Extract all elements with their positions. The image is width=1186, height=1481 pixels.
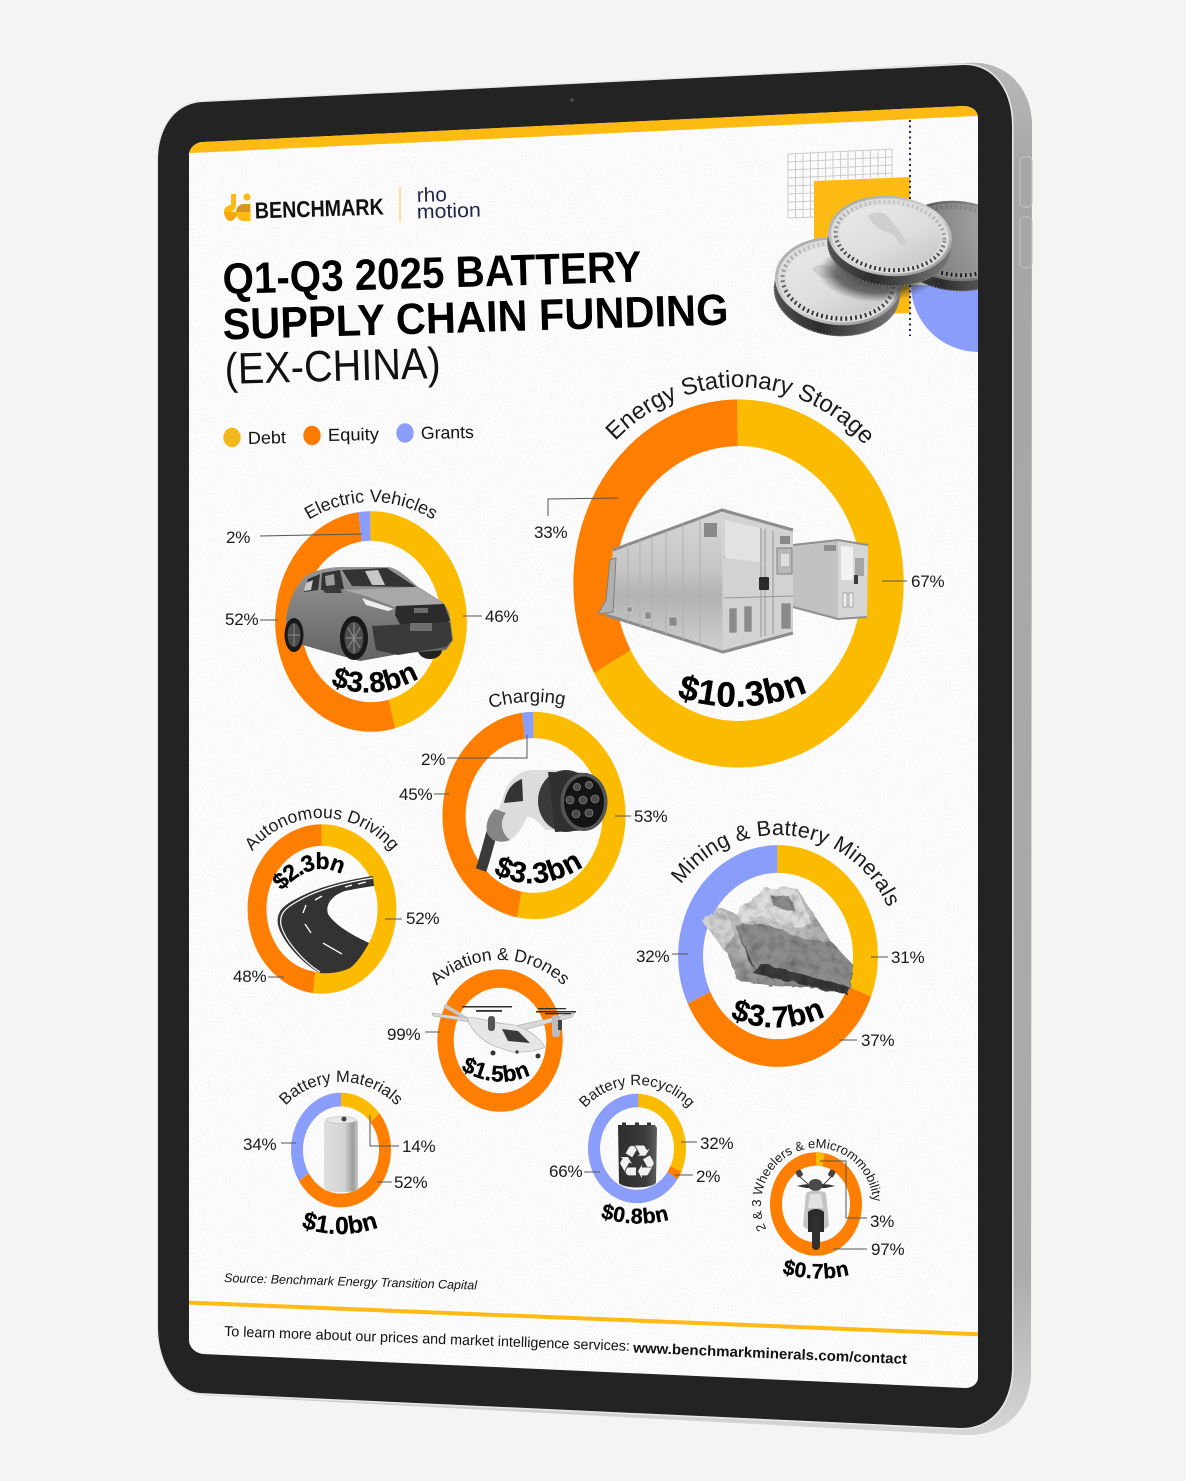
value: $3.7bn — [732, 999, 824, 1028]
pct 37: 37% — [861, 1031, 895, 1050]
panel: Charging — [399, 688, 667, 920]
donut chart — [594, 1100, 680, 1196]
panel: Battery Recycling — [550, 1074, 733, 1224]
logo: Benchmark — [224, 187, 400, 223]
pct 14: 14% — [402, 1137, 436, 1156]
icon: recycling battery: ♻ — [616, 1135, 658, 1189]
pct 99: 99% — [387, 1025, 421, 1044]
leader lines — [672, 954, 888, 1040]
label: Charging — [489, 688, 565, 708]
legend — [223, 422, 474, 448]
source note: Source: Benchmark Energy Transition Capital — [224, 1271, 478, 1293]
pct 45: 45% — [399, 785, 433, 804]
label: Energy Stationary Storage — [605, 370, 872, 443]
leader lines — [584, 1142, 697, 1175]
icon: scooter — [795, 1169, 836, 1250]
label: Aviation & Drones — [432, 948, 568, 986]
donut chart — [594, 423, 883, 744]
pct 32: 32% — [636, 947, 670, 966]
value: $3.8bn — [332, 666, 418, 693]
pct 33: 33% — [534, 523, 568, 542]
pct 34: 34% — [243, 1135, 277, 1154]
panel: Electric Vehicles — [226, 490, 518, 732]
pct 52: 52% — [225, 610, 259, 629]
logo wordmark: BENCHMARK — [254, 193, 384, 223]
footer call to action — [224, 1324, 907, 1368]
leader lines — [281, 1115, 399, 1182]
legend: equity: Equity — [328, 424, 379, 445]
legend: equity — [303, 424, 379, 445]
panel: Mining & Battery Minerals — [636, 820, 924, 1067]
screen — [189, 106, 978, 1388]
value: $0.7bn — [783, 1259, 848, 1279]
pct 53: 53% — [634, 807, 668, 826]
legend: grants — [396, 422, 474, 443]
front container — [598, 510, 793, 652]
label: Battery Recycling — [578, 1074, 694, 1108]
legend: grants: Grants — [421, 422, 474, 443]
title: Q1-Q3 2025 BATTERY — [222, 243, 642, 304]
decoration: dotted line — [909, 120, 911, 336]
pct 32: 32% — [700, 1134, 734, 1153]
logo: rho motion: motion — [416, 199, 481, 223]
title: (EX-CHINA) — [224, 339, 441, 394]
pct 3: 3% — [870, 1212, 894, 1231]
icon: EV charger — [481, 770, 608, 870]
icon: road — [278, 876, 374, 973]
logo: rho motion: rho — [416, 184, 447, 207]
legend: debt: Debt — [248, 427, 286, 448]
pct 66: 66% — [549, 1162, 583, 1181]
panel: Autonomous Driving — [233, 808, 439, 994]
legend: debt — [223, 427, 286, 448]
tablet silver frame — [158, 63, 1032, 1435]
leader lines — [820, 1161, 867, 1249]
label: 2 & 3 Wheelers & eMicrommobility — [752, 1138, 880, 1232]
value: $1.5bn — [462, 1057, 530, 1082]
pct 2: 2% — [421, 750, 445, 769]
footer call to action: www.benchmarkminerals.com/contact — [632, 1340, 907, 1368]
value: $2.3bn — [273, 852, 344, 889]
leader lines — [548, 498, 907, 581]
leader line — [425, 1031, 440, 1033]
tablet camera — [570, 98, 574, 102]
pct 46: 46% — [485, 607, 519, 626]
donut chart — [288, 526, 454, 717]
panel: Aviation & Drones — [388, 948, 576, 1112]
donut chart — [297, 1100, 385, 1200]
label: Autonomous Driving — [246, 808, 398, 852]
tablet device — [158, 63, 1032, 1435]
icon: battery cell — [324, 1116, 358, 1192]
donut chart — [454, 725, 614, 906]
donut chart — [446, 978, 554, 1102]
leader lines — [260, 534, 482, 620]
tablet side buttons — [1020, 157, 1032, 268]
icon: coins — [774, 196, 978, 336]
panel: Energy Stationary Storage — [534, 370, 944, 768]
title: SUPPLY CHAIN FUNDING — [222, 286, 729, 349]
value: $1.0bn — [302, 1211, 378, 1234]
pct 52: 52% — [394, 1173, 428, 1192]
top yellow band — [189, 106, 978, 154]
label: Electric Vehicles — [304, 490, 436, 519]
pct 48: 48% — [233, 967, 267, 986]
tablet bezel — [158, 65, 1012, 1428]
pct 31: 31% — [891, 948, 925, 967]
decoration: yellow square — [814, 177, 910, 317]
value: $0.8bn — [601, 1204, 668, 1224]
divider — [399, 187, 401, 222]
leader lines — [434, 735, 631, 816]
title — [222, 243, 729, 394]
bottom yellow rule — [185, 1300, 985, 1336]
screen paper — [185, 100, 985, 1395]
pct 67: 67% — [911, 572, 945, 591]
decoration: blue quarter circle — [911, 285, 979, 352]
pct 52: 52% — [406, 909, 440, 928]
icon: battery containers — [598, 510, 868, 652]
footer call to action: To learn more about our prices and market intelligence services: — [224, 1324, 630, 1355]
value: $3.3bn — [495, 855, 582, 884]
pct 2: 2% — [226, 528, 250, 547]
label: Battery Materials — [278, 1070, 402, 1105]
icon: car — [284, 567, 453, 661]
donut chart — [690, 859, 866, 1053]
icon: eVTOL aircraft — [432, 1004, 576, 1058]
decoration: grid — [788, 149, 892, 218]
logo: rho motion — [418, 187, 480, 218]
donut chart — [257, 835, 387, 983]
label: Mining & Battery Minerals — [670, 820, 897, 906]
panel: Battery Materials — [244, 1070, 435, 1234]
icon: mineral rock — [703, 888, 855, 995]
rear container — [793, 540, 868, 619]
value: $10.3bn — [678, 674, 806, 707]
pct 2: 2% — [696, 1167, 720, 1186]
pct 97: 97% — [871, 1240, 905, 1259]
leader lines — [268, 919, 402, 977]
icon: Benchmark mark — [224, 193, 251, 221]
panel: 2 & 3 Wheelers & eMicromobility — [752, 1138, 904, 1279]
donut chart — [776, 1159, 856, 1249]
